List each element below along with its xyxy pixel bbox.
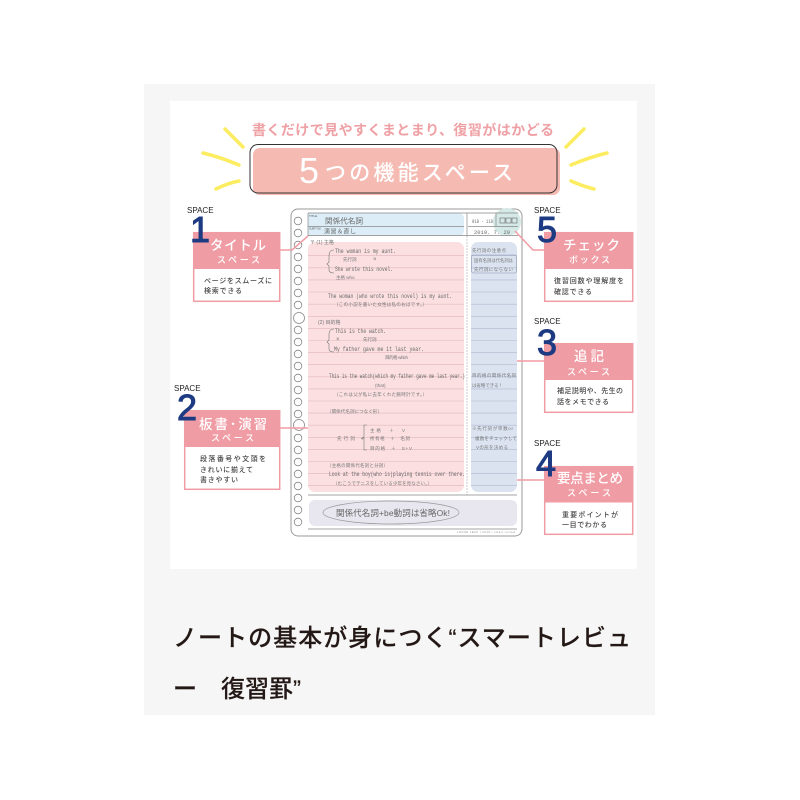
callout 4: 要点まとめスペース: 重要ポイントが xyxy=(562,510,618,519)
handwritten notes in board space xyxy=(310,239,465,487)
handwritten notes in board space: 目的格 which xyxy=(385,354,408,361)
handwritten notes in board space: 先行詞 xyxy=(343,256,357,263)
callout 2: 板書・演習スペース: 書きやすい xyxy=(200,475,238,484)
banner: 5つの機能スペース xyxy=(250,144,560,195)
callout 3: 追記スペース: 追記 xyxy=(574,349,604,364)
check box space (green circle) xyxy=(472,208,521,236)
callout 2: 板書・演習スペース: 板書･演習 xyxy=(199,416,267,432)
banner: 5つの機能スペース: つの機能スペース xyxy=(325,162,513,185)
icon: yellow rays left xyxy=(203,129,243,189)
handwritten notes in board space: My father gave me it last year. xyxy=(334,346,424,353)
handwritten notes in review space xyxy=(472,247,517,451)
infographic white panel xyxy=(170,101,637,569)
check box space (green circle): 2019. 7. 29 xyxy=(474,230,510,236)
handwritten notes in review space: 固有名詞は代名詞は xyxy=(474,257,513,264)
handwritten notes in board space: 先行詞 ＋ xyxy=(337,435,365,442)
handwritten notes in board space: × xyxy=(336,337,340,343)
callout 2: 板書・演習スペース: SPACE xyxy=(174,384,201,393)
handwritten notes in board space: 目的格 ＋ S+V xyxy=(370,445,412,452)
callout 3: 追記スペース: SPACE xyxy=(534,317,561,326)
ruled lines xyxy=(308,256,464,486)
title space (blue): 演習＆直し xyxy=(324,228,356,236)
handwritten notes in board space: This is the watch(which my father gave me last year.) xyxy=(329,373,465,380)
callout 5: チェックボックス: 復習回数や理解度を xyxy=(554,276,624,285)
callout 3: 追記スペース: スペース xyxy=(567,367,610,377)
callout 5: チェックボックス: ボックス xyxy=(569,255,610,265)
handwritten notes in board space: She wrote this novel. xyxy=(335,266,393,273)
callout 4: 要点まとめスペース xyxy=(534,439,633,534)
handwritten notes in board space: （この小説を書いた女性は私のおばです。） xyxy=(334,301,427,308)
article title: ー 復習罫” xyxy=(173,676,301,703)
handwritten notes in board space: （むこうでテニスをしている少年を見なさい。） xyxy=(333,480,432,487)
callout 3: 追記スペース xyxy=(534,317,633,412)
title space (blue): SUBTITLE xyxy=(309,228,321,230)
gray card background xyxy=(144,84,655,715)
callout 3: 追記スペース: 3 xyxy=(537,322,557,363)
handwritten notes in review space: 複数をチェックして xyxy=(475,435,517,442)
handwritten notes in review space: は省略できる！ xyxy=(472,382,503,389)
callout 5: チェックボックス: 5 xyxy=(537,209,557,250)
handwritten notes in review space: 目的格の関係代名詞 xyxy=(472,372,516,379)
handwritten notes in review space: ※先行詞が単数or xyxy=(472,425,514,432)
connector lines xyxy=(280,231,544,480)
callout 5: チェックボックス xyxy=(534,206,633,301)
callout 2: 板書・演習スペース: スペース xyxy=(211,433,254,443)
handwritten notes in review space: 先行詞にならない xyxy=(474,266,514,273)
handwritten notes in board space: This is the watch. xyxy=(335,328,386,335)
handwritten notes in board space: 先行詞 xyxy=(363,336,377,343)
handwritten notes in board space: × xyxy=(373,257,377,263)
summary space xyxy=(309,500,517,526)
icon: binder holes xyxy=(294,217,304,526)
subtitle: 書くだけで見やすくまとまり、復習がはかどる xyxy=(252,122,554,138)
callout 1: タイトルスペース: ページをスムーズに xyxy=(204,276,272,285)
footer microtext: LOOSE LEAF | 2019 | smart review xyxy=(457,531,515,534)
handwritten notes in board space: 主格 who xyxy=(336,274,355,281)
callout 1: タイトルスペース: SPACE xyxy=(187,206,214,215)
handwritten notes in board space: （関係代名詞につなぐ形） xyxy=(327,408,382,415)
callout 1: タイトルスペース xyxy=(187,206,280,301)
handwritten notes in board space: Look at the boy(who is)playing tennis over there. xyxy=(329,471,465,478)
callout 2: 板書・演習スペース: 段落番号や文頭を xyxy=(200,454,266,463)
callout 4: 要点まとめスペース: スペース xyxy=(567,488,611,498)
title space (blue): TITLE xyxy=(309,214,317,218)
handwritten notes in board space: 主格 ＋ V xyxy=(370,427,405,434)
callout 5: チェックボックス: チェック xyxy=(563,238,620,253)
board writing space (pink) xyxy=(308,242,464,492)
callout 1: タイトルスペース: 検索できる xyxy=(204,286,242,295)
callout 3: 追記スペース: 話をメモできる xyxy=(557,397,609,406)
icon: yellow rays right xyxy=(566,129,607,189)
handwritten notes in board space: (that) xyxy=(375,383,386,388)
callout 4: 要点まとめスペース: 4 xyxy=(536,443,556,484)
handwritten notes in review space: 先行詞の注意点 xyxy=(472,247,506,254)
callout 2: 板書・演習スペース: きれいに揃えて xyxy=(200,465,253,474)
callout 1: タイトルスペース: タイトル xyxy=(210,238,266,253)
banner: 5つの機能スペース: 5 xyxy=(299,150,319,191)
handwritten notes in board space: (2) 目的格 xyxy=(318,319,341,326)
notebook page diagram xyxy=(291,208,522,536)
callout 5: チェックボックス: 確認できる xyxy=(554,287,592,296)
handwritten notes in board space: （主格の関係代名詞と分詞） xyxy=(327,462,388,469)
handwritten notes in board space: （これは父が私に去年くれた腕時計です。） xyxy=(334,391,427,398)
handwritten notes in review space: Vの形を決める xyxy=(476,444,508,451)
callout 2: 板書・演習スペース xyxy=(174,384,280,489)
handwritten notes in board space: 〒 (1) 主格 xyxy=(310,239,334,246)
callout 4: 要点まとめスペース: SPACE xyxy=(534,439,561,448)
article title: ノートの基本が身につく“スマートレビュ xyxy=(173,625,631,652)
check box space (green circle): 018 - 118 xyxy=(472,218,493,225)
article title xyxy=(173,625,631,703)
title space (blue): 関係代名詞 xyxy=(325,216,363,226)
callout 1: タイトルスペース: スペース xyxy=(217,255,260,265)
callout 5: チェックボックス: SPACE xyxy=(534,206,561,215)
callout 4: 要点まとめスペース: 一目でわかる xyxy=(562,521,607,529)
callout 4: 要点まとめスペース: 要点まとめ xyxy=(557,471,623,486)
review note space (blue) xyxy=(471,242,517,492)
callout 3: 追記スペース: 補足説明や、先生の xyxy=(557,386,623,395)
handwritten notes in board space: 所有格 ＋ 名詞 xyxy=(370,435,410,442)
callout 2: 板書・演習スペース: 2 xyxy=(177,387,197,428)
summary space: 関係代名詞+be動詞は省略Ok! xyxy=(336,508,450,518)
handwritten notes in board space: The woman is my aunt. xyxy=(335,248,396,255)
callout 1: タイトルスペース: 1 xyxy=(190,209,210,250)
title space (blue) xyxy=(308,213,464,236)
header rules xyxy=(308,213,518,236)
handwritten notes in board space: The woman (who wrote this novel) is my aunt. xyxy=(328,293,452,300)
